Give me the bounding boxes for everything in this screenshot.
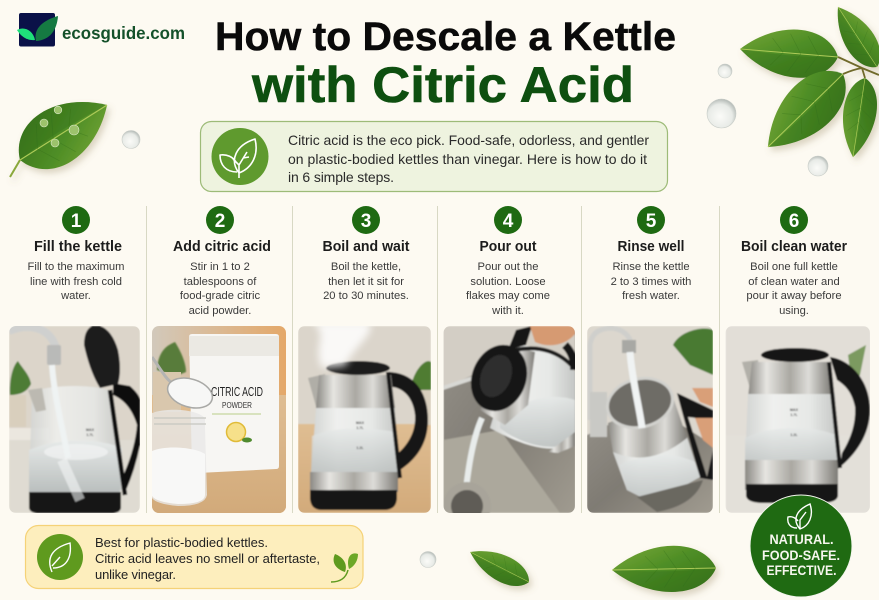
step 1 text: Fill the kettle: [34, 239, 122, 255]
photo: clean kettle on counter: 1.2L: [790, 433, 798, 437]
step 5 text: Rinse well: [618, 239, 684, 255]
icon: leaf in circle: [212, 128, 268, 185]
logo: ecosguide.com: [62, 23, 185, 43]
badge: natural, food-safe, effective: [750, 495, 852, 597]
step 2 text: acid powder.: [189, 305, 251, 317]
tip callout: Citric acid leaves no smell or aftertaste,: [95, 551, 320, 566]
badge: natural, food-safe, effective: FOOD-SAFE.: [762, 547, 840, 563]
step 1 text: water.: [60, 290, 91, 302]
step 2 text: 2: [215, 211, 225, 232]
step 4 text: solution. Loose: [470, 276, 546, 288]
step 6 text: 6: [789, 211, 799, 232]
step 2 text: Add citric acid: [173, 239, 271, 255]
step 5 text: fresh water.: [622, 290, 680, 302]
step 6 text: using.: [779, 305, 809, 317]
photo: citric acid pouch, spoon and jar: CITRIC ACID: [211, 384, 263, 399]
step 4 text: 4: [503, 211, 514, 232]
icon: sprout: [331, 553, 358, 582]
step 5 text: Rinse the kettle: [612, 261, 690, 273]
photo: boiling stainless steel kettle with steam: MAX: [356, 421, 365, 425]
photo: pouring kettle into sink: [443, 326, 576, 530]
badge: natural, food-safe, effective: NATURAL.: [770, 531, 834, 547]
photo: filling glass kettle under tap: [9, 326, 140, 513]
step 2 text: [173, 206, 271, 317]
tip callout: [26, 526, 363, 588]
step 1 text: [28, 206, 124, 302]
step 3 text: 3: [361, 211, 371, 232]
intro callout: Citric acid is the eco pick. Food-safe, odorless, and gentler: [288, 132, 649, 148]
icon: leaf badge: [37, 534, 83, 580]
photo: citric acid pouch, spoon and jar: POWDER: [222, 400, 252, 410]
intro callout: in 6 simple steps.: [288, 169, 394, 185]
photo: boiling stainless steel kettle with steam: 1.2L: [356, 446, 364, 450]
step 4 text: Pour out the: [478, 261, 538, 273]
photo: filling glass kettle under tap: 1.7L: [86, 433, 94, 437]
title: [215, 15, 676, 113]
step 2 text: tablespoons of: [184, 276, 257, 288]
photo: rinsing kettle under tap: [587, 326, 713, 513]
title: with Citric Acid: [251, 57, 634, 113]
photo: clean kettle on counter: [726, 326, 870, 513]
step 3 text: then let it sit for: [328, 276, 404, 288]
step 3 text: Boil and wait: [322, 239, 410, 255]
icon: badge leaf: [788, 504, 811, 529]
step 6 text: Boil one full kettle: [750, 261, 838, 273]
step 5 text: [611, 206, 691, 302]
photo: boiling stainless steel kettle with steam: [298, 322, 431, 513]
step 3 text: [322, 206, 410, 302]
step 4 text: Pour out: [480, 239, 537, 255]
step 3 text: 20 to 30 minutes.: [323, 290, 409, 302]
step 2 text: Stir in 1 to 2: [190, 261, 250, 273]
photo: boiling stainless steel kettle with steam: 1.7L: [356, 426, 364, 430]
step 6 text: [741, 206, 847, 317]
step 6 text: of clean water and: [748, 276, 840, 288]
decorative leaf: bottom small: [464, 540, 535, 594]
photo: clean kettle on counter: MAX: [790, 408, 799, 412]
tip callout: Best for plastic-bodied kettles.: [95, 535, 268, 550]
badge: natural, food-safe, effective: EFFECTIVE.: [766, 562, 836, 578]
step 1 text: line with fresh cold: [30, 276, 122, 288]
step 5 text: 5: [646, 211, 657, 232]
step 2 text: food-grade citric: [180, 290, 261, 302]
tip callout: unlike vinegar.: [95, 567, 176, 582]
photo: filling glass kettle under tap: MAX: [86, 428, 95, 432]
step 6 text: pour it away before: [746, 290, 842, 302]
step 4 text: flakes may come: [466, 290, 550, 302]
step 1 text: 1: [71, 211, 82, 232]
step 5 text: 2 to 3 times with: [611, 276, 691, 288]
decorative leaves: top right branch: [738, 0, 879, 165]
intro callout: [200, 122, 668, 192]
step 6 text: Boil clean water: [741, 239, 847, 255]
step 1 text: Fill to the maximum: [28, 261, 124, 273]
photo: clean kettle on counter: 1.7L: [790, 413, 798, 417]
step 4 text: [466, 206, 550, 317]
decorative leaf: top left with droplets: [5, 81, 122, 184]
step 3 text: Boil the kettle,: [331, 261, 401, 273]
step 4 text: with it.: [491, 305, 524, 317]
decorative leaf: bottom large: [612, 545, 716, 593]
intro callout: on plastic-bodied kettles than vinegar. Here is how to do it: [288, 151, 647, 167]
title: How to Descale a Kettle: [215, 15, 676, 59]
water droplets: [122, 64, 828, 568]
photo: citric acid pouch, spoon and jar: [152, 326, 286, 513]
logo: [17, 13, 185, 46]
